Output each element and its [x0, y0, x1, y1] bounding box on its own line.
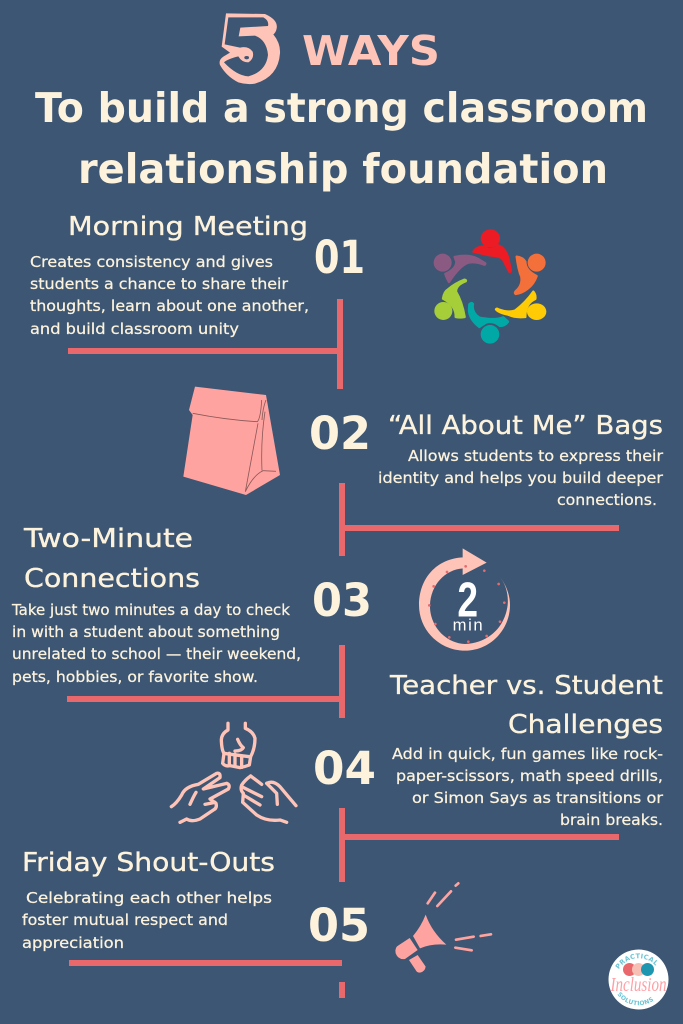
number 01: 01: [314, 231, 365, 284]
heading: two-minute connections: Two-Minute: [23, 524, 193, 554]
icon: circle of people: [434, 229, 546, 344]
text block: all about me bags: identity and helps you build deeper: [378, 469, 664, 487]
heading: teacher vs student challenges: Challenges: [508, 710, 663, 740]
text block: two-minute connections: in with a student about something: [12, 623, 280, 641]
text block: two-minute connections: [11, 601, 301, 686]
text block: all about me bags: Allows students to express their: [408, 447, 664, 465]
title: relationship foundation: [78, 145, 608, 193]
text block: teacher vs student challenges: [392, 745, 664, 829]
heading: friday shout-outs: Friday Shout-Outs: [22, 848, 275, 878]
text block: friday shout-outs: appreciation: [22, 934, 124, 952]
connector 03: [67, 645, 345, 718]
number 04: 04: [313, 742, 376, 795]
text block: friday shout-outs: Celebrating each other helps: [26, 889, 272, 907]
heading: two-minute connections: Connections: [24, 564, 200, 594]
text block: friday shout-outs: [22, 889, 272, 952]
icon: two minute timer: min: [453, 616, 483, 635]
text block: morning meeting: students a chance to share their: [30, 275, 289, 293]
text block: morning meeting: and build classroom unity: [30, 320, 239, 338]
heading: teacher vs student challenges: [389, 671, 663, 740]
logo: practical inclusion solutions: PRACTICAL: [615, 953, 658, 969]
number 02: 02: [309, 407, 371, 460]
text block: morning meeting: [30, 253, 309, 338]
logo: practical inclusion solutions: Inclusion: [610, 974, 666, 996]
text block: teacher vs student challenges: or Simon Says as transitions or: [412, 789, 664, 807]
text block: all about me bags: connections.: [557, 491, 657, 509]
heading: two-minute connections: [23, 524, 200, 594]
heading: ways: WAYS: [302, 27, 440, 75]
heading: morning meeting: Morning Meeting: [68, 212, 308, 242]
text block: teacher vs student challenges: brain breaks.: [560, 811, 663, 829]
text block: two-minute connections: pets, hobbies, or favorite show.: [12, 668, 258, 686]
text block: morning meeting: Creates consistency and gives: [30, 253, 273, 271]
icon: rock paper scissors hands: [171, 723, 296, 822]
logo: practical inclusion solutions: [608, 950, 668, 1010]
icon: number five: [220, 13, 280, 84]
panel: two-minute connections: [11, 524, 510, 718]
icon: two minute timer: 2: [457, 573, 478, 628]
connector 05: [69, 960, 345, 998]
text block: two-minute connections: Take just two minutes a day to check: [11, 601, 290, 619]
heading: all about me bags: “All About Me” Bags: [388, 411, 663, 441]
panel: all about me bags: [183, 387, 664, 556]
panel: teacher vs student challenges: [171, 671, 664, 882]
text block: morning meeting: thoughts, learn about one another,: [30, 297, 309, 315]
text block: two-minute connections: unrelated to school — their weekend,: [12, 645, 301, 663]
icon: paper bag: [183, 387, 280, 495]
number 03: 03: [312, 574, 372, 627]
icon: megaphone: [395, 883, 491, 973]
title: To build a strong classroom: [35, 84, 648, 132]
panel: morning meeting: [30, 212, 546, 389]
icon: two minute timer: [419, 548, 510, 651]
title: [35, 84, 648, 193]
connector 04: [339, 808, 619, 882]
connector 02: [339, 483, 619, 556]
text block: friday shout-outs: foster mutual respect and: [22, 911, 228, 929]
heading: teacher vs student challenges: Teacher vs. Student: [389, 671, 663, 701]
text block: all about me bags: [378, 447, 664, 509]
number 05: 05: [308, 899, 370, 952]
text block: teacher vs student challenges: Add in quick, fun games like rock-: [392, 745, 663, 763]
panel: friday shout-outs: [22, 848, 491, 998]
logo: practical inclusion solutions: SOLUTIONS: [618, 992, 653, 1006]
text block: teacher vs student challenges: paper-scissors, math speed drills,: [396, 767, 663, 785]
connector 01: [68, 299, 343, 389]
